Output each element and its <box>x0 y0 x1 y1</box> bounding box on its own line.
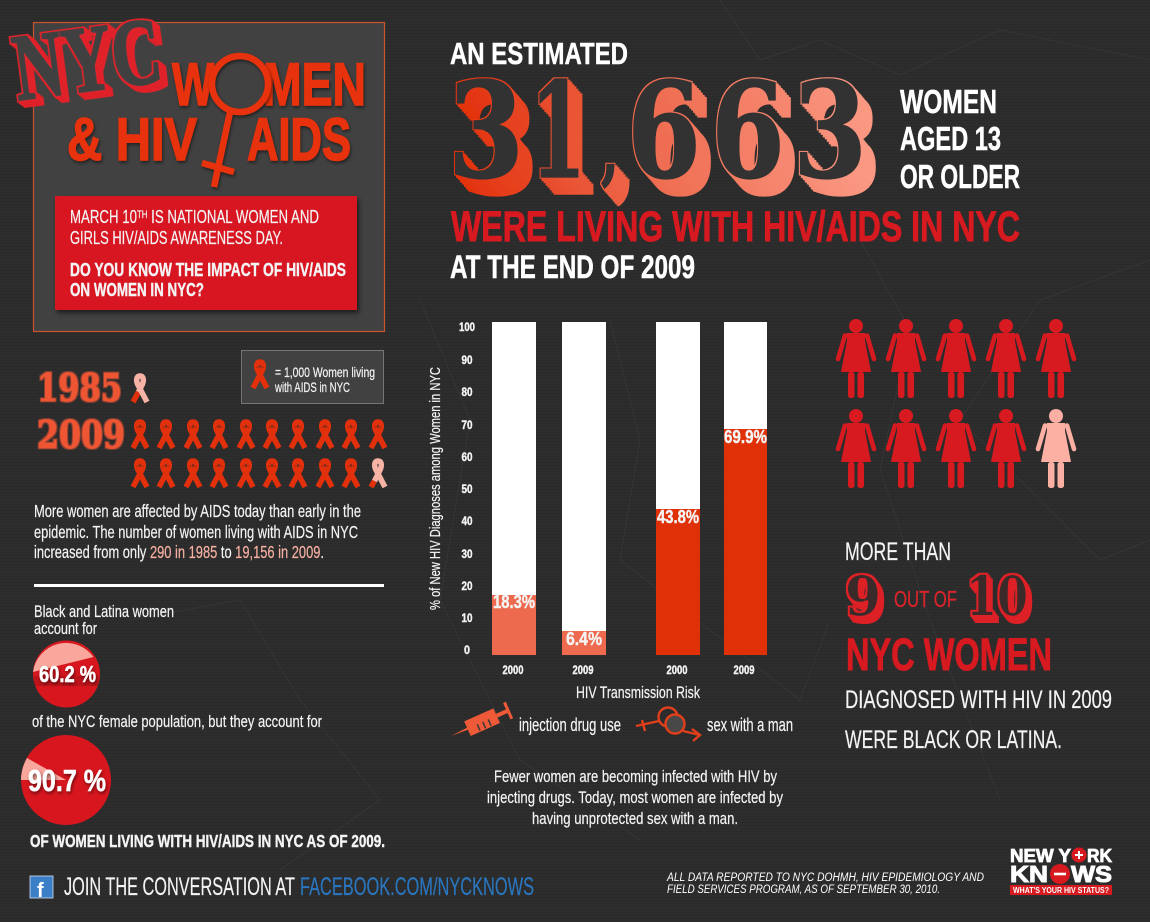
big number: 31,663: 3 <box>448 54 524 209</box>
axis ticks: 40 <box>462 516 472 528</box>
axis ticks: 80 <box>462 387 472 399</box>
text block: fewer women infected: having unprotected sex with a man. <box>532 809 738 828</box>
logo: New York Knows: KN <box>1010 861 1048 887</box>
panel: title box <box>7 0 385 331</box>
callout: awareness day: ON WOMEN IN NYC? <box>70 279 204 300</box>
text block: women affected by AIDS <box>34 501 361 562</box>
label: year 1985: 1985 <box>37 365 122 410</box>
heading: WOMEN: W <box>172 51 214 118</box>
stat: 9 out of 10 <box>845 564 1028 628</box>
logo: New York Knows: RK <box>1087 846 1112 866</box>
text: diagnosed with HIV: WERE BLACK OR LATINA. <box>845 726 1062 754</box>
bar chart: HIV transmission risk <box>427 322 767 677</box>
text block: women affected by AIDS: increased from only 290 in 1985 to 19,156 in 2009. <box>34 542 324 562</box>
stat: 9 out of 10: 10 <box>966 564 1028 628</box>
bar: sex with a man 2000 <box>656 322 700 655</box>
icon row: ribbons 2009 second row <box>133 461 385 487</box>
bar: injection drug use 2009: 6.4% <box>566 629 602 649</box>
panel: ribbon legend: with AIDS in NYC <box>274 379 350 395</box>
axis ticks: 100 <box>459 322 475 334</box>
axis ticks: 20 <box>462 581 472 593</box>
text block: Black and Latina women <box>34 602 174 638</box>
text: women aged 13 or older: OR OLDER <box>900 158 1020 195</box>
chart: pie 60.2 percent <box>33 640 100 708</box>
axis title: % of New HIV Diagnoses among Women in NYC <box>427 367 444 610</box>
text: of women living with HIV/AIDS: OF WOMEN LIVING WITH HIV/AIDS IN NYC AS OF 2009. <box>30 831 385 851</box>
axis ticks: 60 <box>462 452 472 464</box>
logo: New York Knows: WHAT'S YOUR HIV STATUS? <box>1013 886 1109 895</box>
text block: women affected by AIDS: epidemic. The number of women living with AIDS in NYC <box>34 522 358 542</box>
chart: pie 90.7 percent <box>21 735 111 825</box>
text: diagnosed with HIV <box>845 686 1112 754</box>
footnote: data source <box>666 872 984 896</box>
heading: AIDS: AIDS <box>247 106 351 173</box>
callout: awareness day: MARCH 10 <box>70 206 164 227</box>
text: women aged 13 or older <box>900 83 1020 195</box>
text: women aged 13 or older: WOMEN <box>900 83 997 120</box>
axis ticks: 90 <box>462 355 472 367</box>
stat: 9 out of 10: 9 <box>845 564 881 628</box>
big number: 31,663: 1 <box>530 54 586 209</box>
callout: awareness day: IS NATIONAL WOMEN AND <box>148 206 319 227</box>
x axis labels: 2000 <box>502 665 524 677</box>
logo: New York Knows: WS <box>1071 861 1112 887</box>
footnote: data source: ALL DATA REPORTED TO NYC DOHMH, HIV EPIDEMIOLOGY AND <box>666 872 984 884</box>
axis ticks: 0 <box>464 645 470 657</box>
call to action: facebook: JOIN THE CONVERSATION AT <box>64 873 295 901</box>
heading: WOMEN: MEN <box>263 51 366 118</box>
panel: ribbon legend: = 1,000 Women living <box>275 364 375 380</box>
text: more than: MORE THAN <box>845 538 951 566</box>
logo: New York Knows <box>1010 846 1112 895</box>
logo: New York Knows: NEW Y <box>1010 846 1071 866</box>
chart: pie 90.7 percent: 90.7 % <box>28 763 106 798</box>
axis ticks: 30 <box>462 549 472 561</box>
big number: 31,663: 6 <box>711 54 785 209</box>
big number: 31,663: , <box>601 108 619 194</box>
footnote: data source: FIELD SERVICES PROGRAM, AS OF SEPTEMBER 30, 2010. <box>667 884 940 896</box>
icon: sex symbols <box>636 708 700 741</box>
chart: pie 60.2 percent: 60.2 % <box>39 661 96 687</box>
legend: injection drug use: injection drug use <box>519 715 621 735</box>
pictogram: 9 of 10 women <box>838 319 1074 488</box>
bar: sex with a man 2000: 43.8% <box>657 507 699 527</box>
heading: at the end of 2009: AT THE END OF 2009 <box>450 249 695 285</box>
heading: & HIV: & HIV <box>67 106 197 173</box>
text block: Black and Latina women: Black and Latina women <box>34 602 174 621</box>
x axis labels: 2009 <box>572 665 594 677</box>
big number: 31,663 <box>448 54 867 209</box>
axis ticks: 10 <box>462 613 472 625</box>
call to action: facebook: FACEBOOK.COM/NYCKNOWS <box>300 873 534 901</box>
bar: sex with a man 2009 <box>724 322 767 655</box>
x axis labels: 2009 <box>734 665 754 677</box>
callout: awareness day: TH <box>137 209 148 221</box>
text block: Black and Latina women: account for <box>34 619 97 638</box>
text: female population: of the NYC female population, but they account for <box>32 712 322 731</box>
panel: ribbon legend <box>242 350 384 404</box>
callout: awareness day: GIRLS HIV/AIDS AWARENESS DAY. <box>70 227 283 248</box>
icon: facebook <box>30 876 53 902</box>
bar: sex with a man 2009: 69.9% <box>724 427 767 447</box>
icon row: ribbons 2009 first row <box>133 422 385 448</box>
heading: an estimated: AN ESTIMATED <box>450 36 628 71</box>
label: year 2009: 2009 <box>37 412 125 457</box>
heading: NYC women: NYC WOMEN <box>846 629 1052 680</box>
legend: sex with a man: sex with a man <box>707 715 793 735</box>
text: women aged 13 or older: AGED 13 <box>900 120 1001 157</box>
big number: 31,663: 6 <box>627 54 701 209</box>
axis ticks <box>459 322 475 657</box>
bar: injection drug use 2000: 18.3% <box>493 592 535 612</box>
callout: awareness day: DO YOU KNOW THE IMPACT OF HIV/AIDS <box>70 259 346 280</box>
icon: facebook: f <box>37 880 44 902</box>
icon: female symbol <box>202 56 268 187</box>
heading: WOMEN <box>172 51 366 118</box>
bar: injection drug use 2000 <box>492 322 536 655</box>
text block: fewer women infected: injecting drugs. Today, most women are infected by <box>487 788 783 807</box>
axis ticks: 50 <box>462 484 472 496</box>
text block: fewer women infected <box>487 767 783 828</box>
bar: injection drug use 2009 <box>562 322 606 655</box>
axis ticks: 70 <box>462 420 472 432</box>
big number: 31,663: 3 <box>793 54 867 209</box>
text block: fewer women infected: Fewer women are becoming infected with HIV by <box>494 767 777 786</box>
icon: ribbon 1985 <box>133 376 147 402</box>
x axis labels <box>502 665 754 677</box>
stat: 9 out of 10: OUT OF <box>894 586 957 612</box>
x axis labels: 2000 <box>666 665 688 677</box>
callout: awareness day <box>55 196 357 310</box>
icon: syringe <box>447 702 513 744</box>
text block: women affected by AIDS: More women are affected by AIDS today than early in the <box>34 501 361 521</box>
chart caption: HIV transmission risk: HIV Transmission Risk <box>576 683 700 702</box>
